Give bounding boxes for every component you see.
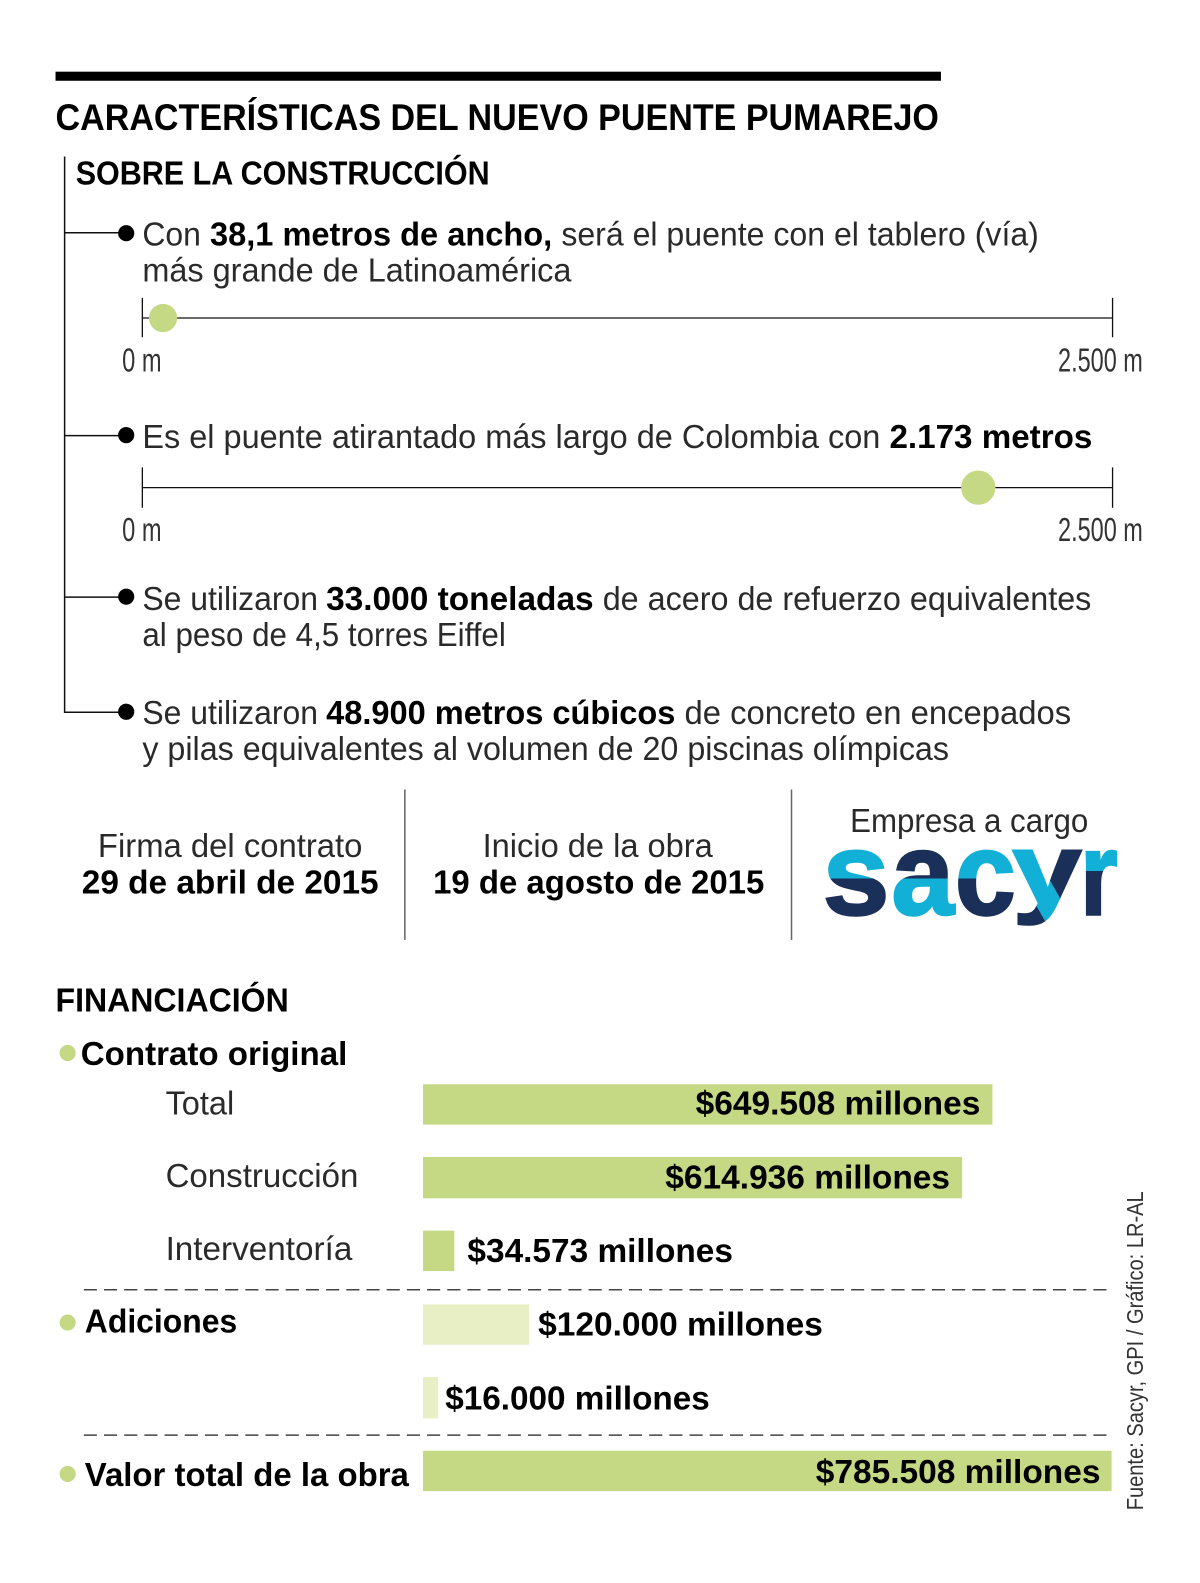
fact text: más grande de Latinoamérica xyxy=(142,253,572,290)
bullet xyxy=(60,1045,76,1061)
fact text: será el puente con el tablero (vía) xyxy=(561,216,1039,253)
value: total: $785.508 millones xyxy=(816,1454,1100,1491)
row: interventoría: $34.573 millones xyxy=(467,1233,733,1270)
column dividers xyxy=(405,789,792,940)
logo: sacyr: c xyxy=(955,809,1016,941)
fact text xyxy=(142,581,1091,654)
empresa a cargo: Empresa a cargo xyxy=(850,803,1088,840)
logo: sacyr: s xyxy=(823,809,889,941)
heading: sobre la construcción: SOBRE LA CONSTRUCCIÓN xyxy=(76,155,490,193)
row: adición 2: $16.000 millones xyxy=(445,1380,710,1417)
fact text xyxy=(142,216,1039,290)
bullet xyxy=(60,1314,76,1331)
bullet xyxy=(118,427,134,443)
panel: financiación xyxy=(56,982,1112,1494)
fact text: de concreto en encepados xyxy=(685,695,1071,732)
row: interventoría xyxy=(166,1231,733,1271)
top rule xyxy=(56,72,941,81)
scale: 38,1 m of 2.500 m xyxy=(122,298,1143,380)
panel: fechas y empresa xyxy=(82,789,1118,941)
firma del contrato: 29 de abril de 2015 xyxy=(82,864,379,901)
fact text: 48.900 metros cúbicos xyxy=(326,695,675,732)
fact text xyxy=(142,695,1071,768)
fact text: 33.000 toneladas xyxy=(326,581,594,618)
fact text: Con xyxy=(142,216,201,253)
group: valor total xyxy=(60,1451,1112,1494)
bullet xyxy=(118,589,134,605)
row: total: Total xyxy=(166,1086,234,1123)
scale: 2.173 m of 2.500 m xyxy=(122,467,1143,549)
row: total: $649.508 millones xyxy=(696,1086,980,1123)
fact text: de acero de refuerzo equivalentes xyxy=(603,581,1091,618)
fact text: Se utilizaron xyxy=(142,695,318,732)
scale: 38,1 m of 2.500 m: 0 m xyxy=(122,343,162,380)
scale: 2.173 m of 2.500 m: 2.500 m xyxy=(1058,512,1143,549)
inicio de la obra xyxy=(433,828,764,901)
row: interventoría: Interventoría xyxy=(166,1231,353,1268)
group: contrato original xyxy=(60,1036,992,1271)
fact text: Se utilizaron xyxy=(142,581,318,618)
row: total xyxy=(166,1084,992,1125)
bar: total xyxy=(423,1451,1112,1491)
source credit: Fuente: Sacyr, GPI / Gráfico: LR-AL xyxy=(1122,1191,1148,1510)
group: adiciones xyxy=(60,1304,823,1418)
firma del contrato xyxy=(82,828,379,901)
scale: 38,1 m of 2.500 m: 2.500 m xyxy=(1058,343,1143,380)
title: CARACTERÍSTICAS DEL NUEVO PUENTE PUMAREJO xyxy=(56,96,939,138)
firma del contrato: Firma del contrato xyxy=(98,828,362,865)
scale: 2.173 m of 2.500 m: 0 m xyxy=(122,512,162,549)
label: valor total de la obra: Valor total de la obra xyxy=(85,1457,409,1494)
logo: sacyr: y xyxy=(1013,815,1082,926)
inicio de la obra: Inicio de la obra xyxy=(483,828,713,865)
fact text: al peso de 4,5 torres Eiffel xyxy=(142,617,506,654)
label: contrato original: Contrato original xyxy=(81,1036,347,1073)
bullet xyxy=(118,704,134,720)
label: adiciones: Adiciones xyxy=(85,1304,237,1341)
bullet xyxy=(60,1466,76,1482)
fact text: Es el puente atirantado más largo de Colombia con xyxy=(142,419,880,456)
panel: sobre la construcción xyxy=(65,155,1143,768)
heading: financiación: FINANCIACIÓN xyxy=(56,982,289,1020)
row: adición 1 xyxy=(423,1304,823,1345)
logo: sacyr xyxy=(823,809,1118,941)
bracket connector lines xyxy=(65,156,119,712)
logo: sacyr: a xyxy=(891,809,955,941)
fact: ancho xyxy=(118,216,1143,380)
fact text: y pilas equivalentes al volumen de 20 piscinas olímpicas xyxy=(142,731,949,768)
fact: concreto xyxy=(118,695,1071,768)
divider dashed xyxy=(84,1289,1111,1291)
fact text: 38,1 metros de ancho, xyxy=(210,216,552,253)
row: adición 1: $120.000 millones xyxy=(538,1307,823,1344)
divider dashed xyxy=(84,1434,1111,1436)
fact: acero xyxy=(118,581,1091,654)
inicio de la obra: 19 de agosto de 2015 xyxy=(433,864,764,901)
fact: largo xyxy=(118,419,1143,549)
row: construcción xyxy=(166,1157,962,1198)
logo: sacyr: r xyxy=(1080,809,1118,941)
fact text: 2.173 metros xyxy=(889,419,1092,456)
row: construcción: $614.936 millones xyxy=(665,1159,950,1196)
bullet xyxy=(118,225,134,241)
row: construcción: Construcción xyxy=(166,1158,358,1195)
